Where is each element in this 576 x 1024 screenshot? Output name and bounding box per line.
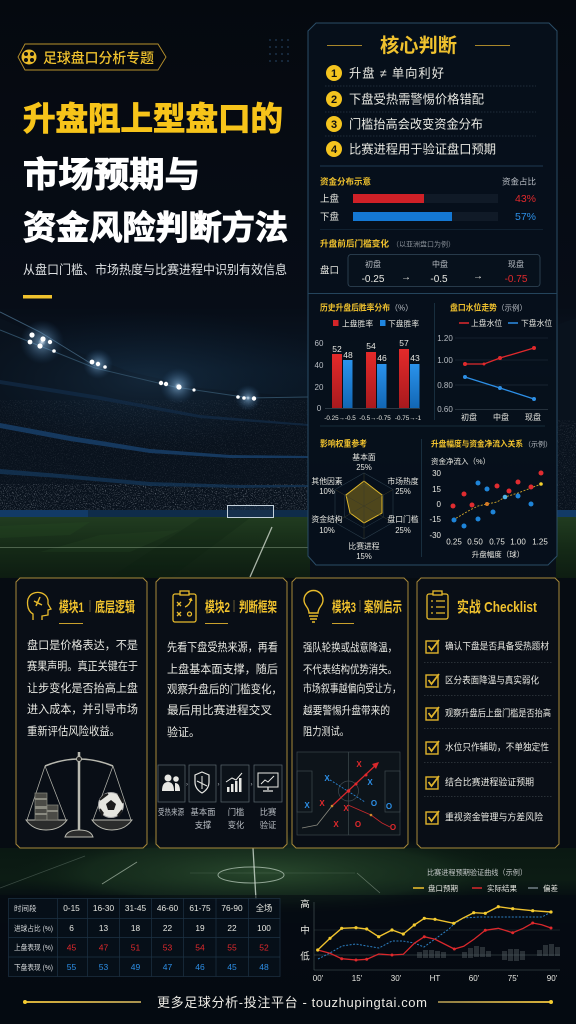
scatter chart: line move vs net inflow: （示例） bbox=[524, 440, 552, 448]
process flow: › bbox=[186, 782, 188, 788]
main title: 市场预期与 bbox=[23, 156, 200, 195]
line chart: water level trend: 上盘水位 bbox=[471, 318, 502, 328]
icon: monitor bbox=[258, 773, 278, 791]
key points list: 下盘受热需警惕价格错配 bbox=[349, 92, 484, 106]
table: goal share and performance by period: 49 bbox=[131, 962, 140, 972]
module 2 body text: 最后用比赛进程交叉 bbox=[167, 703, 272, 717]
table: goal share and performance by period: 100 bbox=[257, 923, 271, 933]
panel: module 1 underlying logic bbox=[16, 578, 147, 848]
bar chart: historical win rate bbox=[315, 302, 422, 422]
main title bbox=[23, 101, 288, 246]
radar chart: influence weights: 影响权重参考 bbox=[320, 438, 367, 448]
panel: module 2 judgement framework bbox=[156, 578, 287, 848]
module 3 heading bbox=[332, 599, 402, 624]
tactics board: O bbox=[371, 799, 377, 808]
radar chart: influence weights: 25% bbox=[395, 487, 411, 496]
table: goal share and performance by period: 22 bbox=[163, 923, 172, 933]
table: goal share and performance by period: 16-30 bbox=[93, 903, 114, 913]
bar chart: historical win rate: （%） bbox=[390, 304, 413, 312]
checklist items bbox=[424, 640, 552, 824]
topic tag bbox=[18, 44, 166, 70]
panel: core judgement and charts bbox=[308, 23, 557, 565]
process flow: 变化 bbox=[228, 820, 244, 830]
tactics board: X bbox=[367, 778, 373, 787]
icon: head with idea bbox=[28, 592, 51, 620]
chart: match progress validation curve: 实际结果 bbox=[487, 883, 517, 893]
radar chart: influence weights: 25% bbox=[395, 526, 411, 535]
bar chart: historical win rate: -0.75→-1 bbox=[395, 415, 422, 422]
table: goal share and performance by period: 61-75 bbox=[189, 903, 211, 913]
module 2 body text bbox=[167, 640, 282, 739]
table: goal share and performance by period: 下盘表现 (%) bbox=[14, 962, 53, 972]
key points list: 1 bbox=[331, 68, 337, 80]
bar chart: historical win rate: 57 bbox=[399, 338, 409, 348]
module 1 heading: 底层逻辑 bbox=[95, 599, 135, 615]
module 1 body text: 让步变化是否抬高上盘 bbox=[27, 681, 138, 695]
chart: match progress validation curve: 中 bbox=[300, 924, 310, 936]
module 2 heading: 模块2 bbox=[205, 599, 230, 615]
panel: practical checklist bbox=[417, 578, 559, 848]
radar chart: influence weights: 25% bbox=[356, 463, 372, 472]
tag text: 足球盘口分析专题 bbox=[43, 50, 154, 66]
module 1 heading bbox=[59, 599, 135, 624]
module 3 body text: 强队轮换或战意降温， bbox=[303, 640, 397, 654]
module 1 heading: 模块1 bbox=[59, 599, 84, 615]
bar chart: historical win rate: 52 bbox=[332, 344, 342, 354]
scatter chart: line move vs net inflow: 15 bbox=[432, 485, 442, 494]
table: goal share and performance by period: 47 bbox=[163, 962, 172, 972]
process flow: › bbox=[250, 782, 252, 788]
main title: 升盘阻上型盘口的 bbox=[23, 101, 283, 137]
key points list: 门槛抬高会改变资金分布 bbox=[349, 116, 483, 132]
table: goal share and performance by period: 6 bbox=[69, 923, 74, 933]
panel: module 3 case insight bbox=[292, 578, 408, 848]
checklist items: 水位只作辅助，不单独定性 bbox=[445, 742, 549, 754]
key points list: 升盘 ≠ 单向利好 bbox=[349, 66, 444, 80]
radar chart: influence weights: 10% bbox=[319, 487, 335, 496]
radar chart: influence weights: 15% bbox=[356, 552, 372, 561]
scatter chart: line move vs net inflow: 1.00 bbox=[510, 538, 526, 546]
process flow: 基本面 bbox=[191, 807, 215, 817]
scatter chart: line move vs net inflow: 30 bbox=[432, 469, 442, 478]
icon: football bbox=[22, 50, 36, 64]
module 2 body text: 验证。 bbox=[167, 725, 200, 739]
module 3 body text: 市场叙事越偏向受让方， bbox=[303, 681, 401, 695]
module 3 body text: 越要警惕升盘带来的 bbox=[303, 703, 390, 717]
radar chart: influence weights: 10% bbox=[319, 526, 335, 535]
checklist heading: 实战 Checklist bbox=[457, 598, 537, 616]
module 1 body text: 进入成本，并引导市场 bbox=[27, 702, 138, 716]
bar chart: historical win rate: -0.25→-0.5 bbox=[324, 415, 356, 422]
scatter chart: line move vs net inflow: 升盘幅度与资金净流入关系 bbox=[431, 438, 523, 448]
tactics board: X bbox=[333, 820, 339, 829]
chart: fund distribution bars bbox=[320, 176, 536, 223]
tactics board: X bbox=[304, 801, 310, 810]
icon: people bbox=[162, 774, 180, 791]
chart: fund distribution bars: 资金分布示意 bbox=[320, 176, 372, 186]
chart: match progress validation curve: 75' bbox=[508, 974, 519, 983]
line chart: water level trend bbox=[437, 302, 552, 422]
tactics board: O bbox=[355, 820, 361, 829]
checklist items: 结合比赛进程验证预期 bbox=[445, 776, 534, 788]
threshold change table: 升盘前后门槛变化 bbox=[320, 238, 389, 248]
bar chart: historical win rate: 20 bbox=[315, 383, 324, 392]
key points list: 比赛进程用于验证盘口预期 bbox=[349, 142, 496, 156]
line chart: water level trend: 0.60 bbox=[437, 405, 453, 414]
chart: match progress validation curve: 偏差 bbox=[543, 883, 558, 893]
radar chart: influence weights: 基本面 bbox=[352, 452, 376, 462]
table: goal share and performance by period: 45 bbox=[67, 942, 76, 952]
bar chart: historical win rate: 0 bbox=[317, 404, 322, 413]
module 3 body text: 不代表结构优势消失。 bbox=[303, 662, 397, 676]
bar chart: historical win rate: 43 bbox=[410, 353, 420, 363]
table: goal share and performance by period: 47 bbox=[99, 942, 108, 952]
icon: rising bars bbox=[226, 773, 242, 792]
chart: fund distribution bars: 43% bbox=[515, 193, 536, 205]
icon: light bulb bbox=[304, 590, 323, 622]
chart: match progress validation curve: HT bbox=[430, 974, 440, 983]
key points list: 2 bbox=[331, 94, 337, 106]
radar chart: influence weights bbox=[311, 438, 419, 561]
threshold change table: → bbox=[401, 272, 411, 283]
table: goal share and performance by period: 22 bbox=[227, 923, 237, 933]
chart: match progress validation curve: 低 bbox=[300, 950, 310, 962]
module 1 body text: 重新评估风险收益。 bbox=[27, 724, 120, 738]
icon: balance scale with coins and football bbox=[26, 752, 132, 837]
chart: match progress validation curve: 90' bbox=[547, 974, 558, 983]
scatter chart: line move vs net inflow: -15 bbox=[429, 515, 442, 524]
tactics board: O bbox=[386, 802, 392, 811]
process flow: 验证 bbox=[260, 820, 276, 830]
radar chart: influence weights: 盘口门槛 bbox=[387, 514, 419, 524]
table: goal share and performance by period: 52 bbox=[259, 942, 269, 952]
bar chart: historical win rate: 46 bbox=[377, 353, 387, 363]
radar chart: influence weights: 资金结构 bbox=[311, 514, 343, 524]
tactics board bbox=[297, 752, 400, 835]
module 3 body text: 阻力测试。 bbox=[303, 725, 349, 738]
chart: fund distribution bars: 57% bbox=[515, 211, 536, 223]
line chart: water level trend: 初盘 bbox=[461, 412, 477, 422]
tactics board: X bbox=[319, 799, 325, 808]
module 3 heading: 案例启示 bbox=[364, 599, 402, 615]
threshold change table bbox=[320, 238, 540, 286]
scatter chart: line move vs net inflow: 0.75 bbox=[489, 538, 505, 546]
chart: fund distribution bars: 资金占比 bbox=[502, 176, 536, 186]
threshold change table: -0.25 bbox=[362, 274, 385, 285]
module 1 body text bbox=[27, 638, 138, 738]
checklist items: 重视资金管理与方差风险 bbox=[445, 812, 543, 824]
checklist items: 确认下盘是否具备受热题材 bbox=[445, 640, 549, 652]
line chart: water level trend: 0.80 bbox=[437, 381, 453, 390]
module 2 body text: 观察升盘后的门槛变化， bbox=[167, 682, 282, 696]
module 2 heading: 判断框架 bbox=[239, 599, 277, 615]
scatter chart: line move vs net inflow: 0 bbox=[437, 500, 442, 509]
tactics board: X bbox=[343, 804, 349, 813]
process flow: 支撑 bbox=[195, 820, 211, 830]
module 1 body text: 赛果声明。真正关键在于 bbox=[27, 659, 138, 673]
chart: match progress validation curve bbox=[300, 867, 560, 983]
table: goal share and performance by period: 55 bbox=[67, 962, 76, 972]
key points list bbox=[325, 65, 536, 157]
radar chart: influence weights: 比赛进程 bbox=[348, 541, 380, 551]
line chart: water level trend: 中盘 bbox=[493, 412, 509, 422]
table: goal share and performance by period: 0-15 bbox=[63, 903, 80, 913]
table: goal share and performance by period: 上盘表现 (%) bbox=[14, 942, 53, 952]
bar chart: historical win rate: 下盘胜率 bbox=[388, 318, 419, 328]
threshold change table: 中盘 bbox=[432, 259, 448, 269]
table: goal share and performance by period: 31-45 bbox=[125, 903, 146, 913]
threshold change table: （以亚洲盘口为例） bbox=[392, 240, 455, 248]
table: goal share and performance by period: 进球占比 (%) bbox=[14, 923, 53, 933]
tactics board: O bbox=[390, 823, 396, 832]
table: goal share and performance by period: 46 bbox=[195, 962, 205, 972]
process flow: 门槛 bbox=[228, 807, 244, 817]
table: goal share and performance by period: 45 bbox=[227, 962, 237, 972]
bar chart: historical win rate: 60 bbox=[315, 339, 324, 348]
line chart: water level trend: 1.20 bbox=[437, 334, 453, 343]
chart: match progress validation curve: 60' bbox=[469, 974, 480, 983]
threshold change table: -0.75 bbox=[505, 274, 528, 285]
radar chart: influence weights: 市场热度 bbox=[387, 476, 419, 486]
chart: match progress validation curve: 30' bbox=[391, 974, 402, 983]
checklist items: 区分表面降温与真实弱化 bbox=[445, 674, 539, 686]
threshold change table: → bbox=[473, 271, 483, 282]
chart: match progress validation curve: 盘口预期 bbox=[428, 883, 458, 893]
dot pattern decoration near title bbox=[269, 39, 289, 62]
scatter chart: line move vs net inflow: 1.25 bbox=[532, 538, 548, 546]
threshold change table: -0.5 bbox=[430, 274, 448, 285]
tactics board: X bbox=[356, 760, 362, 769]
icon: shield bbox=[195, 772, 209, 793]
table: goal share and performance by period: 19 bbox=[195, 923, 205, 933]
module 2 body text: 上盘基本面支撑，随后 bbox=[167, 662, 278, 676]
table: goal share and performance by period: 51 bbox=[131, 942, 140, 952]
module 1 body text: 盘口是价格表达，不是 bbox=[27, 638, 138, 652]
line chart: water level trend: 现盘 bbox=[525, 412, 541, 422]
threshold change table: 盘口 bbox=[320, 264, 339, 276]
threshold change table: 初盘 bbox=[365, 259, 381, 269]
key points list: 4 bbox=[331, 144, 338, 156]
radar chart: influence weights: 其他因素 bbox=[311, 476, 343, 486]
table: goal share and performance by period: 时间段 bbox=[14, 903, 37, 913]
module 2 heading bbox=[205, 599, 277, 624]
bar chart: historical win rate: 40 bbox=[315, 361, 324, 370]
heading: core judgement: 核心判断 bbox=[380, 34, 457, 57]
line chart: water level trend: 下盘水位 bbox=[521, 318, 552, 328]
table: goal share and performance by period: 55 bbox=[227, 942, 237, 952]
chart: fund distribution bars: 上盘 bbox=[320, 193, 340, 205]
chart: match progress validation curve: 00' bbox=[313, 974, 324, 983]
table: goal share and performance by period: 18 bbox=[131, 923, 140, 933]
line chart: water level trend: 盘口水位走势 bbox=[450, 302, 497, 312]
table: goal share and performance by period: 53 bbox=[99, 962, 108, 972]
threshold change table: 现盘 bbox=[508, 259, 524, 269]
bar chart: historical win rate: -0.5→-0.75 bbox=[359, 415, 391, 422]
scatter chart: line move vs net inflow: 0.25 bbox=[446, 538, 462, 546]
chart: match progress validation curve: 高 bbox=[300, 898, 310, 910]
subtitle: 从盘口门槛、市场热度与比赛进程中识别有效信息 bbox=[23, 262, 287, 277]
table: goal share and performance by period: 48 bbox=[259, 962, 269, 972]
module 2 body text: 先看下盘受热来源，再看 bbox=[167, 640, 278, 654]
module 3 body text bbox=[303, 640, 401, 738]
scatter chart: line move vs net inflow: 升盘幅度（球） bbox=[472, 549, 524, 559]
footer bbox=[23, 995, 553, 1010]
process flow: 比赛 bbox=[260, 807, 277, 817]
process flow: 受热来源 bbox=[158, 807, 185, 817]
scatter chart: line move vs net inflow: -30 bbox=[429, 531, 442, 540]
table: goal share and performance by period bbox=[8, 898, 280, 976]
icon: tactics clipboard bbox=[173, 591, 196, 622]
bar chart: historical win rate: 54 bbox=[366, 341, 376, 351]
key points list: 3 bbox=[331, 119, 337, 131]
chart: match progress validation curve: 15' bbox=[352, 974, 363, 983]
scatter chart: line move vs net inflow: 资金净流入（%） bbox=[431, 456, 490, 466]
chart: fund distribution bars: 下盘 bbox=[320, 211, 340, 223]
process flow: › bbox=[218, 782, 220, 788]
bar chart: historical win rate: 上盘胜率 bbox=[342, 318, 373, 328]
footer: 更多足球分析-投注平台 - touzhupingtai.com bbox=[157, 995, 427, 1010]
scatter chart: line move vs net inflow bbox=[429, 438, 552, 559]
table: goal share and performance by period: 13 bbox=[99, 923, 108, 933]
chart: match progress validation curve: 比赛进程预期验证曲线（示例） bbox=[427, 867, 527, 877]
table: goal share and performance by period: 76-90 bbox=[221, 903, 243, 913]
line chart: water level trend: 1.00 bbox=[437, 356, 453, 365]
bar chart: historical win rate: 48 bbox=[343, 350, 353, 360]
table: goal share and performance by period: 46-60 bbox=[157, 903, 178, 913]
accent rule bbox=[23, 295, 52, 298]
table: goal share and performance by period: 全场 bbox=[256, 903, 272, 913]
main title: 资金风险判断方法 bbox=[23, 209, 288, 246]
line chart: water level trend: （示例） bbox=[497, 302, 527, 312]
bar chart: historical win rate: 历史升盘后胜率分布 bbox=[320, 302, 390, 312]
tactics board: X bbox=[324, 774, 330, 783]
table: goal share and performance by period: 53 bbox=[163, 942, 172, 952]
table: goal share and performance by period: 54 bbox=[195, 942, 205, 952]
scatter chart: line move vs net inflow: 0.50 bbox=[467, 538, 483, 546]
process flow bbox=[158, 765, 282, 830]
checklist items: 观察升盘后上盘门槛是否抬高 bbox=[445, 708, 551, 720]
icon: checklist clipboard bbox=[427, 591, 448, 619]
module 3 heading: 模块3 bbox=[332, 599, 356, 615]
